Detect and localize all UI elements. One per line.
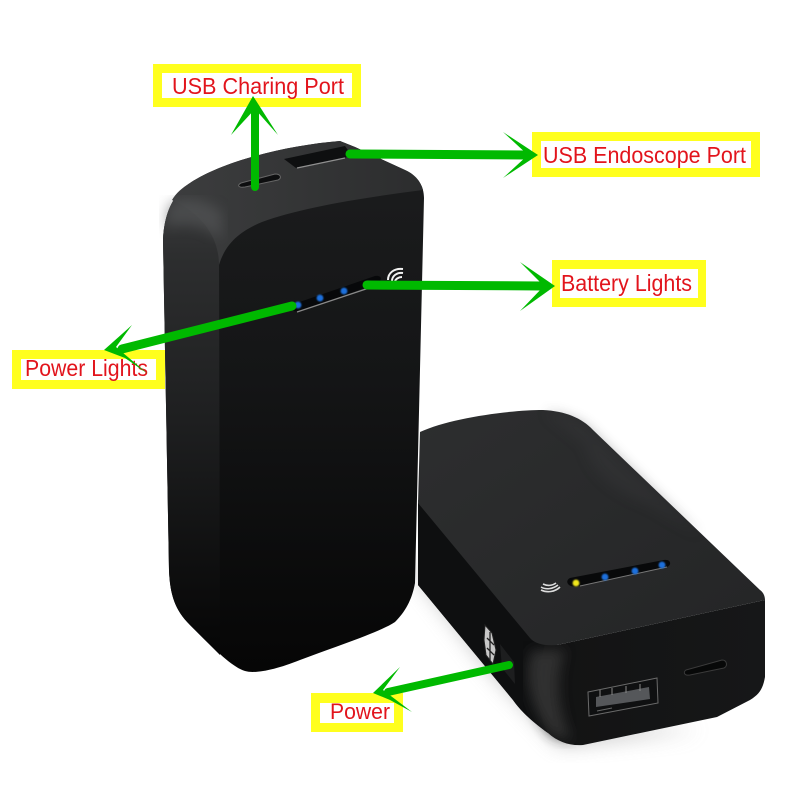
device: standing power bank (163, 141, 424, 672)
icon: wireless mark (388, 269, 403, 282)
USB-C port top (239, 174, 280, 187)
label: USB Endoscope Port (532, 132, 760, 177)
light bar (291, 276, 381, 312)
label: Power: Power (330, 699, 390, 724)
top cap (172, 141, 423, 265)
left side face (163, 170, 260, 655)
top edge sheen (545, 412, 700, 535)
label: USB Endoscope Port: USB Endoscope Port (543, 142, 747, 168)
arrow: power lights (104, 306, 292, 374)
top face (418, 410, 765, 645)
USB-A port top (284, 146, 352, 168)
arrow: USB endoscope port (350, 132, 538, 178)
arrow: USB charging port (231, 96, 278, 187)
label: Battery Lights (552, 260, 706, 307)
label: Power Lights (12, 350, 165, 389)
icon: wireless mark (541, 583, 560, 592)
device: lying power bank (418, 410, 765, 745)
label: Power (311, 693, 403, 732)
cap highlight (165, 199, 222, 240)
light bar (567, 560, 670, 587)
power button and logo (484, 625, 515, 684)
label: USB Charing Port: USB Charing Port (172, 73, 345, 99)
label: USB Charing Port (153, 64, 361, 107)
arrow: battery lights (367, 262, 555, 311)
label: Battery Lights: Battery Lights (561, 270, 692, 296)
floor shadow (412, 565, 700, 745)
micro USB port (684, 660, 726, 675)
front highlight (528, 650, 572, 740)
body side and front (418, 500, 765, 745)
arrow: power button (373, 665, 509, 712)
USB-A port (588, 678, 658, 716)
label: Power Lights: Power Lights (25, 355, 148, 381)
left side shade (418, 500, 548, 733)
main body (163, 141, 424, 672)
